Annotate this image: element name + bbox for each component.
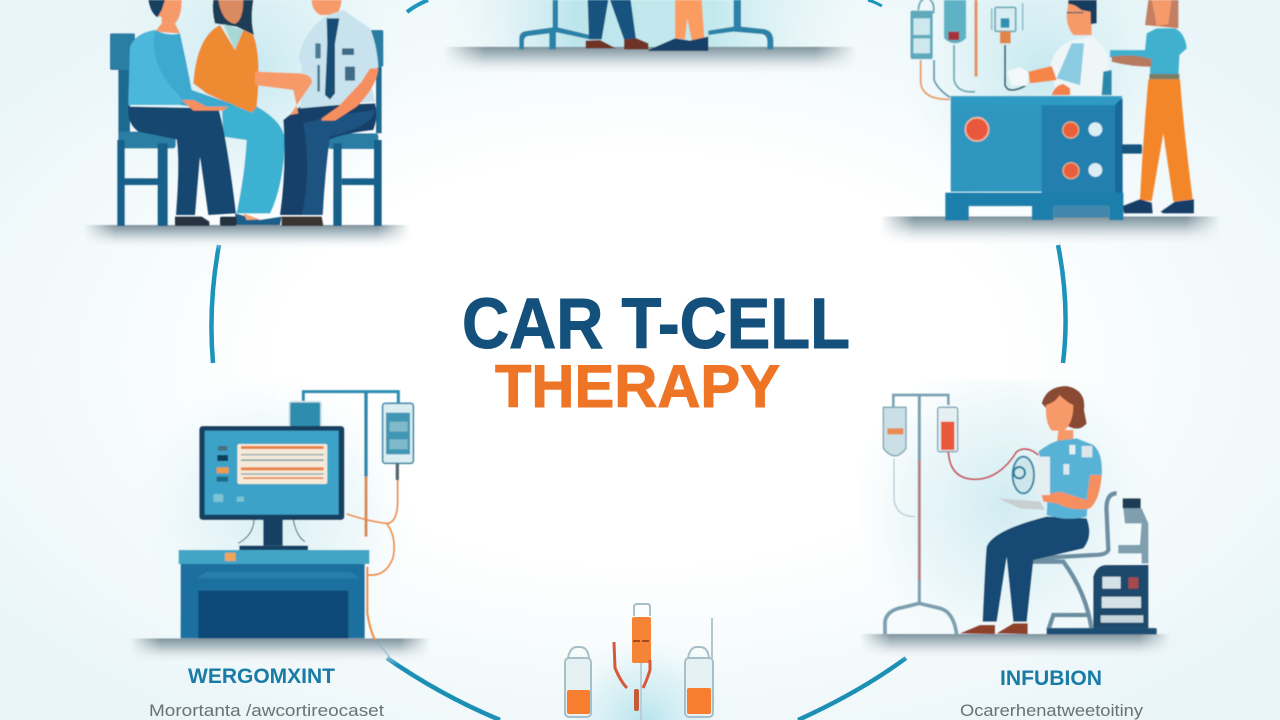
panel: cell collection scene top: [446, 0, 854, 69]
text: infusion step description: Ocarerhenatweetoitiny: [960, 701, 1144, 720]
legs: first person: [588, 0, 636, 39]
panel: bottom centre cell bags: [557, 604, 733, 720]
iv bag: rear: [289, 402, 321, 430]
person: nurse: [960, 386, 1102, 634]
panel: consultation with patient and doctor: [83, 0, 410, 250]
person: woman in orange: [193, 0, 285, 225]
cycle arc: right: [1058, 245, 1066, 363]
cycle arc: bottom right: [798, 658, 906, 720]
label: workstation step heading: WERGOMXINT: [188, 665, 335, 688]
title: THERAPY: [495, 353, 780, 420]
chair: right: [328, 30, 383, 226]
iv bag: centre: [614, 604, 651, 720]
iv stand: [885, 395, 957, 634]
panel: infusion with seated nurse: [860, 380, 1170, 661]
IV stand left base: [519, 0, 590, 49]
legs: second person: [675, 0, 704, 41]
cycle arc: left: [211, 245, 219, 363]
computer monitor: [199, 426, 344, 551]
iv bag: saline: [883, 407, 915, 517]
panel: cell manufacturing machine: [880, 0, 1220, 247]
iv tubing: [918, 0, 1027, 99]
cycle arc: bottom left: [387, 658, 500, 720]
person: technician in lab coat: [1007, 0, 1112, 95]
IV stand right base: [708, 0, 773, 49]
cycle arc: top right stub: [868, 0, 882, 6]
iv bag: right: [685, 618, 713, 717]
person: doctor with tie: [255, 0, 378, 226]
machine body: [945, 96, 1142, 221]
label: infusion step heading: INFUBION: [1000, 667, 1102, 690]
iv bag: cells and line: [938, 407, 1038, 479]
person: assistant in orange trousers: [1110, 0, 1194, 213]
chair: left: [110, 33, 176, 226]
cycle arc: top left stub: [407, 0, 428, 12]
iv bag: right: [383, 403, 413, 480]
iv bags: [911, 0, 1023, 59]
title: [462, 285, 850, 420]
shoes: first person: [586, 38, 648, 49]
person: patient in blue: [128, 0, 237, 226]
chair and monitor unit: [1035, 493, 1157, 634]
shoes: second person: [648, 37, 708, 51]
iv bag: left: [565, 647, 591, 717]
tubing and bags: [303, 392, 398, 657]
desk: [179, 550, 369, 638]
title: CAR T-CELL: [462, 285, 850, 364]
text: workstation step description: Morortanta /awcortireocaset: [149, 701, 384, 720]
panel: bottom left monitoring workstation: [130, 380, 430, 665]
